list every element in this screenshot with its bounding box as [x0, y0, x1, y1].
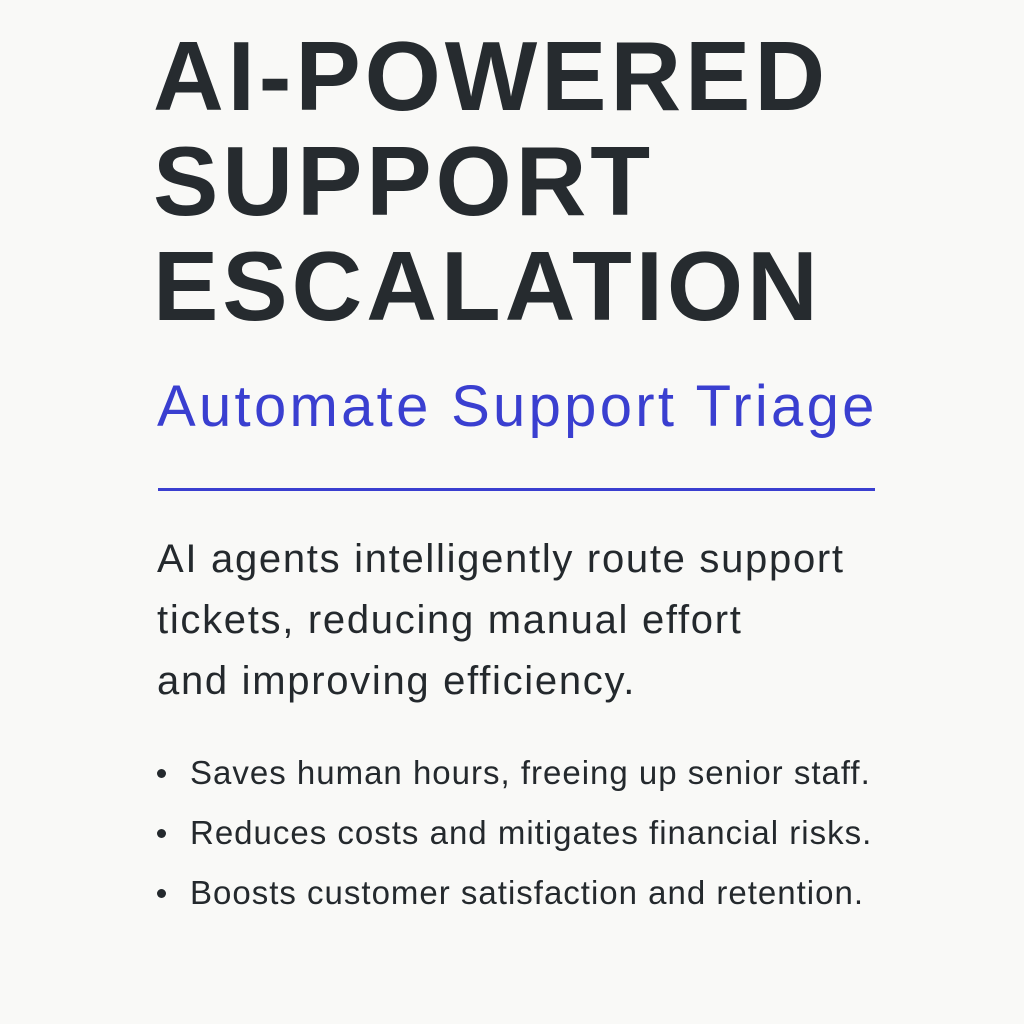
bullet 3: Boosts customer satisfaction and retention. — [190, 874, 864, 911]
body text — [157, 537, 845, 703]
title: SUPPORT — [153, 126, 654, 236]
subtitle: Automate Support Triage — [157, 374, 878, 439]
body text: AI agents intelligently route support — [157, 537, 845, 581]
bullet 1: Saves human hours, freeing up senior staff. — [190, 754, 871, 791]
title: ESCALATION — [153, 231, 822, 341]
title — [153, 21, 829, 341]
body text: tickets, reducing manual effort — [157, 598, 743, 642]
body text: and improving efficiency. — [157, 659, 636, 703]
bullet list — [157, 754, 872, 911]
title: AI-POWERED — [153, 21, 829, 131]
bullet 2: Reduces costs and mitigates financial risks. — [190, 814, 872, 851]
